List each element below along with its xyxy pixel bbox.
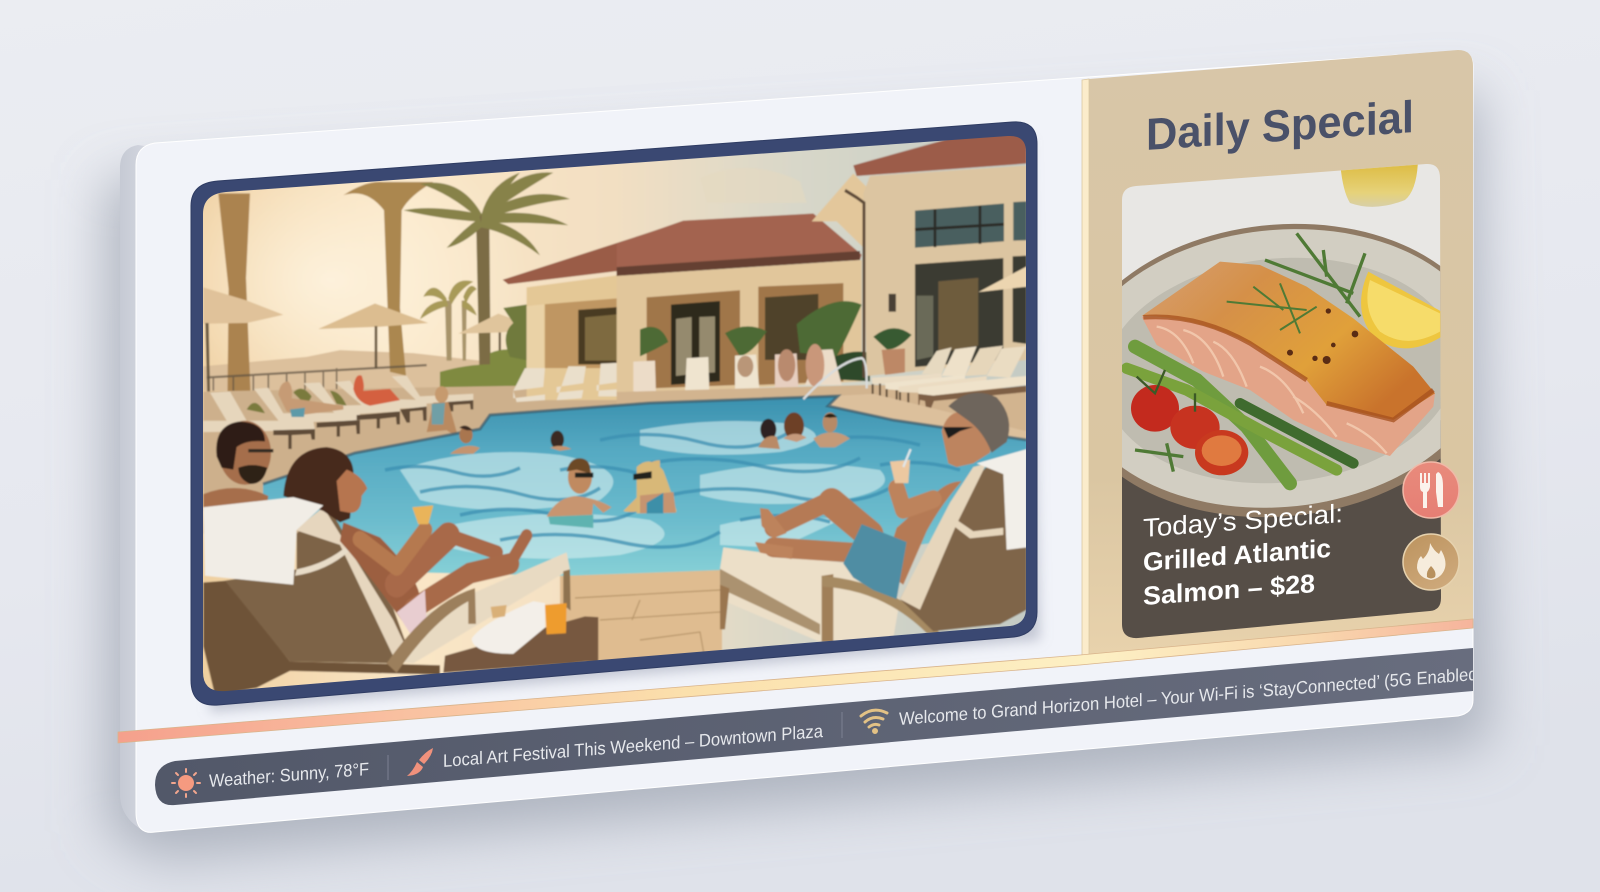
upper roof	[853, 133, 1027, 176]
photo frame	[191, 122, 1037, 705]
lounger cream edge	[295, 507, 410, 663]
dill on salmon	[1227, 283, 1317, 333]
porch interior	[544, 298, 618, 369]
far loungers	[512, 362, 618, 403]
hair	[283, 447, 354, 522]
ticker bar	[155, 648, 1483, 805]
far guests and loungers	[633, 344, 842, 395]
hair	[948, 393, 1009, 453]
glass	[890, 460, 910, 483]
deck tile lines	[575, 590, 720, 660]
lower deck	[560, 570, 722, 680]
icon: flame	[1403, 534, 1459, 590]
building wall	[617, 260, 862, 396]
deck	[617, 385, 1027, 503]
lower windows	[915, 256, 1027, 367]
gable	[812, 174, 872, 247]
photo front left	[203, 421, 660, 695]
side table	[443, 616, 598, 673]
upper windows	[915, 201, 1027, 248]
roof shadow eave	[617, 251, 860, 276]
head	[942, 412, 993, 467]
accent stripe	[118, 619, 1473, 743]
icon: fork and knife	[1403, 462, 1459, 518]
deck loungers	[203, 376, 473, 432]
upper windows mullion	[915, 206, 1004, 247]
plate well	[1098, 245, 1462, 496]
distant hills	[203, 350, 480, 391]
panel shadow	[105, 90, 1490, 860]
food photo	[1060, 160, 1500, 645]
shorts	[843, 524, 907, 599]
potted plant	[873, 328, 912, 375]
window reflections	[938, 278, 978, 353]
today's special caption	[1143, 498, 1343, 611]
right umbrella	[459, 313, 514, 334]
swimsuit	[397, 590, 427, 633]
pool curb	[828, 394, 1027, 442]
woman	[283, 447, 527, 633]
right deck loungers	[872, 346, 1027, 409]
left umbrella	[203, 287, 283, 324]
arm	[897, 488, 933, 510]
lounger cushion	[398, 552, 570, 663]
photo front right	[633, 358, 1027, 642]
salmon plating	[1127, 233, 1442, 483]
man lounger base	[720, 547, 940, 642]
man	[755, 393, 1009, 599]
dill sprigs	[1135, 233, 1365, 472]
plate rim	[1060, 209, 1500, 532]
salmon seared top	[1142, 262, 1435, 420]
panel left side edge	[120, 145, 170, 833]
wall lamp	[889, 294, 896, 312]
straw	[903, 449, 911, 467]
left palm trunk	[218, 193, 251, 413]
pool handrail	[803, 358, 867, 399]
legs	[397, 535, 527, 609]
right umbrella	[978, 266, 1027, 292]
porch interior	[647, 283, 843, 388]
wall	[526, 275, 618, 400]
gutter	[845, 190, 864, 378]
door	[671, 301, 720, 385]
center umbrella	[318, 303, 428, 329]
deck	[203, 385, 618, 534]
salmon spice spots	[1287, 308, 1358, 364]
pool water	[263, 396, 1027, 576]
sun glow	[203, 182, 467, 365]
sky	[200, 120, 1030, 700]
blond swimmer	[633, 462, 677, 513]
bushes	[440, 349, 527, 391]
signage panel	[120, 51, 1473, 833]
sunglasses	[943, 427, 973, 438]
cream vertical stripe	[1082, 79, 1089, 659]
icon: paintbrush	[407, 748, 433, 776]
lemon wedge	[1361, 272, 1442, 348]
small palms	[420, 281, 477, 361]
pale clouds	[700, 168, 807, 203]
porch plants	[640, 301, 862, 356]
palm crown	[403, 172, 570, 255]
upper wall	[863, 165, 1027, 376]
orange drink	[545, 603, 567, 634]
third palm trunk	[476, 214, 491, 368]
weather text: Weather: Sunny, 78°F	[209, 759, 369, 791]
tomatoes	[1131, 385, 1248, 475]
face	[337, 470, 367, 513]
daily special title: Daily Special	[1146, 91, 1414, 160]
man chair back	[900, 463, 1027, 631]
salmon crust	[1143, 317, 1433, 420]
plant	[620, 329, 660, 361]
caption line 3: Salmon – $28	[1143, 568, 1315, 611]
panel: tan background	[1089, 50, 1473, 656]
welcome wi-fi text: Welcome to Grand Horizon Hotel – Your Wi-Fi is ‘StayConnected’ (5G Enabled)	[899, 663, 1483, 729]
torso	[340, 522, 427, 624]
plate body	[1065, 214, 1495, 522]
swimmers	[450, 426, 572, 454]
swimmer couple	[547, 458, 660, 528]
man towel	[977, 449, 1027, 550]
caption line 2: Grilled Atlantic	[1143, 533, 1331, 577]
pool edge tile	[263, 396, 1027, 484]
dark table area	[1120, 420, 1445, 645]
sunbather guests	[278, 375, 400, 417]
photo back left	[203, 172, 660, 534]
legs	[773, 501, 870, 553]
panel front face	[136, 51, 1473, 832]
lounger base	[563, 569, 571, 611]
swimmers trio	[758, 412, 850, 449]
lounger fabric back	[225, 507, 410, 663]
door glass	[676, 316, 715, 376]
tomato stems	[1137, 370, 1195, 412]
shrubs between loungers	[247, 389, 347, 413]
lounger 2	[885, 346, 977, 400]
photo: resort pool	[203, 136, 1026, 692]
ticker background	[155, 648, 1473, 805]
photo back right	[616, 136, 1026, 440]
small glass	[491, 605, 507, 618]
lounger 1	[872, 347, 952, 396]
lounger 3	[898, 346, 1003, 405]
towel on lounger	[203, 497, 323, 585]
door	[578, 306, 618, 366]
torso	[883, 481, 962, 585]
pool highlights	[400, 421, 885, 559]
daily special side panel	[1082, 50, 1473, 659]
icon: sun	[172, 769, 200, 797]
photo frame shadow	[205, 140, 1040, 712]
art festival text: Local Art Festival This Weekend – Downtown Plaza	[443, 721, 824, 771]
arm	[360, 530, 425, 567]
glass	[412, 505, 433, 524]
marble tabletop	[1120, 160, 1445, 490]
man left	[203, 421, 273, 511]
lounger 4	[918, 346, 1027, 409]
deck lounger frames	[273, 400, 473, 449]
pool ripples	[385, 432, 960, 547]
feet	[755, 508, 793, 559]
roof	[502, 232, 649, 285]
salmon flakes	[1157, 327, 1387, 453]
fence	[207, 365, 427, 391]
lower roof	[618, 212, 862, 266]
icon: wifi	[861, 710, 887, 732]
foreground lounger	[203, 507, 571, 695]
caption line 1: Today’s Special:	[1143, 498, 1343, 543]
asparagus	[1127, 347, 1353, 483]
plate	[1060, 209, 1500, 532]
porch window	[765, 294, 818, 360]
salmon flesh side	[1142, 317, 1435, 456]
hedge	[835, 352, 870, 381]
lounger frame	[203, 581, 440, 695]
folded towel	[472, 601, 545, 654]
oil glass	[1340, 160, 1418, 207]
armrest	[387, 588, 476, 673]
far guest	[637, 363, 653, 381]
second palm trunk	[343, 182, 433, 376]
guest on pool edge	[427, 386, 458, 438]
columns	[526, 304, 544, 368]
